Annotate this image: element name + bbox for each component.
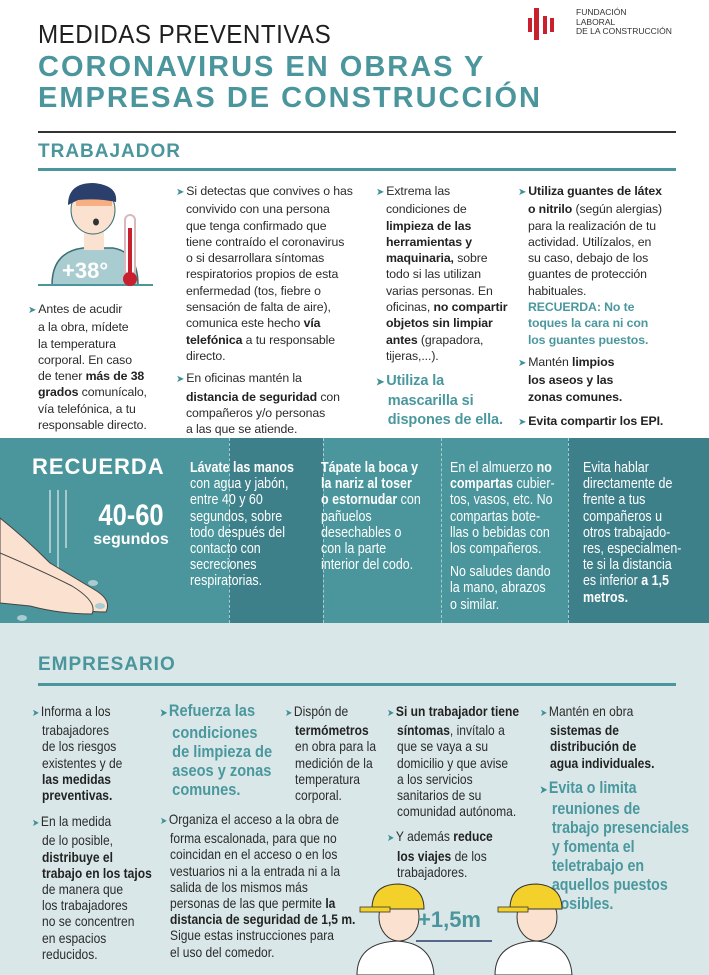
text: emp col2 refuerza: condiciones — [172, 723, 257, 742]
text: sintomas — [387, 703, 519, 880]
text: worker col2: respiratorios propios de esta — [186, 267, 338, 281]
text: 40-60 segundos — [93, 499, 169, 548]
text: worker col1: de tener más de 38 — [38, 369, 144, 383]
text: worker col3: ➤Utiliza la — [376, 373, 444, 389]
text: almuerzo: o similar. — [450, 597, 499, 613]
text: emp col1: existentes y de — [42, 755, 122, 771]
text: almuerzo: la mano, abrazos — [450, 580, 546, 596]
text: worker col3: tijeras,...). — [386, 349, 439, 363]
text: worker col4: los aseos y las — [528, 373, 613, 387]
text: worker col1: a la obra, mídete — [38, 320, 129, 334]
text: evita hablar — [583, 460, 681, 606]
text: tapate boca: Tápate la boca y — [321, 460, 418, 476]
text: emp col1 — [32, 703, 152, 962]
text: worker col3: condiciones de — [386, 202, 467, 216]
text: lavate manos: contacto con — [190, 541, 261, 557]
text: worker col4: ➤Utiliza guantes de látex — [518, 184, 662, 198]
text: worker col4: guantes de protección — [528, 267, 647, 281]
text: emp col1: trabajadores — [42, 722, 109, 738]
text: termometros: ➤Dispón de — [285, 703, 348, 719]
text: almuerzo: compartas cubier- — [450, 476, 555, 492]
text: tapate boca: desechables o — [321, 525, 401, 541]
text: emp col1: de manera que — [42, 881, 123, 897]
text: agua / teletrabajo: agua individuales. — [550, 755, 654, 771]
panel: recuerda band — [0, 438, 709, 623]
text: worker col2: ➤En oficinas mantén la — [176, 371, 302, 385]
text: worker col1: la temperatura — [38, 337, 116, 351]
icon: two workers with helmets and distance — [356, 884, 572, 975]
text: emp col2 refuerza: aseos y zonas — [172, 761, 271, 780]
text: worker col4: para la realización de tu — [528, 219, 656, 233]
text: evita hablar: Evita hablar — [583, 460, 649, 476]
text: lavate manos: Lávate las manos — [190, 460, 294, 476]
text: worker col1 — [28, 302, 147, 432]
text: worker col4: zonas comunes. — [528, 390, 622, 404]
text: worker col3: mascarilla si — [388, 393, 474, 409]
text: emp col1: en espacios — [42, 930, 106, 946]
text: worker col3: objetos sin limpiar — [386, 316, 493, 330]
text: worker col4: toques la cara ni con — [528, 316, 648, 330]
text: almuerzo: llas o bebidas con — [450, 525, 550, 541]
text: emp col1: trabajo en los tajos — [42, 865, 152, 881]
text: organiza: ➤Organiza el acceso a la obra de — [160, 811, 339, 827]
text: lavate manos — [190, 460, 294, 589]
logo: FUNDACIÓN — [576, 7, 627, 17]
text: emp col1: reducidos. — [42, 946, 98, 962]
text: termometros: corporal. — [295, 787, 342, 803]
text: sintomas: ➤Y además reduce — [387, 828, 493, 844]
text: almuerzo: No saludes dando — [450, 564, 551, 580]
text: emp col1: de lo posible, — [42, 832, 113, 848]
text: lavate manos: segundos, sobre — [190, 509, 282, 525]
text: evita hablar: te si la distancia — [583, 557, 672, 573]
text: emp col2 refuerza: de limpieza de — [172, 742, 272, 761]
text: worker col4: RECUERDA: No te — [528, 300, 634, 314]
text: worker col1: corporal. En caso — [38, 353, 132, 367]
text: tapate boca: o estornudar con — [321, 492, 421, 508]
text: agua / teletrabajo: teletrabajo en — [552, 857, 644, 875]
text: worker col2: distancia de seguridad con — [186, 390, 340, 404]
text: emp col1: de los riesgos — [42, 738, 116, 754]
text: 40-60 segundos: segundos — [93, 531, 169, 548]
text: lavate manos: con agua y jabón, — [190, 476, 288, 492]
text: worker col3: limpieza de las — [386, 219, 471, 233]
text: worker col2: directo. — [186, 349, 225, 363]
text: emp col1: no se concentren — [42, 913, 134, 929]
text: evita hablar: res, especialmen- — [583, 541, 681, 557]
text: sintomas: síntomas, invítalo a — [397, 722, 505, 738]
text: termometros — [285, 703, 376, 803]
text: worker col3: varias personas. En — [386, 284, 493, 298]
text: sintomas: sanitarios de su — [397, 787, 481, 803]
text: 40-60 segundos: 40-60 — [98, 499, 164, 532]
icon: two workers with helmets and distance: +1,5m — [418, 907, 481, 932]
text: agua / teletrabajo: sistemas de — [550, 722, 619, 738]
text: agua / teletrabajo: y fomenta el — [552, 838, 635, 856]
text: organiza: coincidan en el acceso o en los — [170, 846, 337, 862]
text: worker col4: ➤Evita compartir los EPI. — [518, 414, 663, 428]
text: organiza: Sigue estas instrucciones para — [170, 927, 334, 943]
title: EMPRESAS DE CONSTRUCCIÓN — [38, 82, 542, 114]
text: worker col4: actividad. Utilízalos, en — [528, 235, 651, 249]
text: worker col2: tiene contraído el coronavirus — [186, 235, 344, 249]
text: tapate boca — [321, 460, 421, 573]
text: worker col3: oficinas, no compartir — [386, 300, 507, 314]
text: termometros: medición de la — [295, 755, 373, 771]
text: termometros: termómetros — [295, 722, 369, 738]
icon: hands washing — [0, 490, 108, 621]
text: tapate boca: interior del codo. — [321, 557, 413, 573]
text: almuerzo: compartas bote- — [450, 509, 540, 525]
text: sintomas: a los servicios — [397, 771, 473, 787]
text: agua / teletrabajo: posibles. — [552, 895, 613, 913]
text: tapate boca: la nariz al toser — [321, 476, 412, 492]
text: agua / teletrabajo — [540, 703, 689, 913]
text: lavate manos: todo después del — [190, 525, 285, 541]
text: evita hablar: es inferior a 1,5 — [583, 573, 669, 589]
text: lavate manos: entre 40 y 60 — [190, 492, 263, 508]
text: worker col3: dispones de ella. — [388, 412, 503, 428]
text: emp col1: los trabajadores — [42, 897, 128, 913]
text: tapate boca: con la parte — [321, 541, 386, 557]
text: worker col3: ➤Extrema las — [376, 184, 450, 198]
text: organiza: salida de los mismos más — [170, 879, 308, 895]
text: worker col1: responsable directo. — [38, 418, 147, 432]
text: evita hablar: otros trabajado- — [583, 525, 670, 541]
text: agua / teletrabajo: ➤Mantén en obra — [540, 703, 633, 719]
text: emp col1: ➤En la medida — [32, 813, 111, 829]
text: termometros: en obra para la — [295, 738, 376, 754]
text: worker col3: antes (grapadora, — [386, 333, 483, 347]
text: emp col1: ➤Informa a los — [32, 703, 111, 719]
text: worker col4: o nitrilo (según alergias) — [528, 202, 662, 216]
text: sintomas: domicilio y que avise — [397, 755, 508, 771]
text: agua / teletrabajo: reuniones de — [552, 800, 640, 818]
text: worker col3: todo si las utilizan — [386, 267, 481, 281]
icon: sick worker with thermometer: +38° — [62, 258, 108, 283]
text: evita hablar: compañeros u — [583, 509, 662, 525]
text: worker col2: a las que se atiende. — [186, 422, 297, 436]
text: evita hablar: directamente de — [583, 476, 672, 492]
icon: sick worker with thermometer — [38, 183, 153, 286]
text: termometros: temperatura — [295, 771, 360, 787]
logo: LABORAL — [576, 16, 615, 26]
text: worker col2: ➤Si detectas que convives o has — [176, 184, 353, 198]
text: lavate manos: respiratorias. — [190, 573, 262, 589]
text: almuerzo — [450, 460, 555, 613]
text: agua / teletrabajo: distribución de — [550, 738, 636, 754]
text: emp col2 refuerza: ➤Refuerza las — [160, 701, 255, 720]
text: worker col3: herramientas y — [386, 235, 472, 249]
logo: DE LA CONSTRUCCIÓN — [576, 26, 672, 36]
text: emp col1: distribuye el — [42, 849, 113, 865]
text: almuerzo: En el almuerzo no — [450, 460, 552, 476]
text: worker col2: convivido con una persona — [186, 202, 330, 216]
text: emp col2 refuerza — [160, 701, 272, 799]
text: worker col2 — [176, 184, 353, 436]
text: agua / teletrabajo: aquellos puestos — [552, 876, 668, 894]
title: MEDIDAS PREVENTIVAS — [38, 19, 331, 49]
text: worker col2: compañeros y/o personas — [186, 406, 325, 420]
text: emp col1: preventivas. — [42, 787, 112, 803]
text: worker col3 — [376, 184, 508, 428]
text: worker col4 — [518, 184, 663, 428]
text: worker col1: grados comunícalo, — [38, 385, 147, 399]
text: organiza: el uso del comedor. — [170, 944, 274, 960]
text: worker col2: o si desarrollara síntomas — [186, 251, 324, 265]
panel: empresario — [0, 623, 709, 975]
text: worker col2: que tenga confirmado que — [186, 219, 326, 233]
text: worker col2: sensación de falta de aire), — [186, 300, 331, 314]
text: worker col4: ➤Mantén limpios — [518, 355, 614, 369]
text: worker col2: enfermedad (tos, fiebre o — [186, 284, 321, 298]
text: worker col1: vía telefónica, a tu — [38, 402, 136, 416]
text: worker col3: maquinaria, sobre — [386, 251, 487, 265]
text: organiza: distancia de seguridad de 1,5 m. — [170, 911, 355, 927]
text: sintomas: que se vaya a su — [397, 738, 488, 754]
title — [38, 19, 542, 114]
text: almuerzo: tos, vasos, etc. No — [450, 492, 553, 508]
text: agua / teletrabajo: trabajo presenciales — [552, 819, 689, 837]
text: lavate manos: secreciones — [190, 557, 257, 573]
text: sintomas: los viajes de los — [397, 848, 487, 864]
text: organiza — [160, 811, 355, 960]
text: worker col2: telefónica a tu responsable — [186, 333, 335, 347]
text: sintomas: ➤Si un trabajador tiene — [387, 703, 519, 719]
text: organiza: personas de las que permite la — [170, 895, 335, 911]
text: organiza: forma escalonada, para que no — [170, 830, 337, 846]
text: sintomas: comunidad autónoma. — [397, 803, 516, 819]
text: almuerzo: los compañeros. — [450, 541, 541, 557]
text: evita hablar: metros. — [583, 590, 628, 606]
text: tapate boca: pañuelos — [321, 509, 372, 525]
text: evita hablar: frente a tus — [583, 492, 645, 508]
text: emp col2 refuerza: comunes. — [172, 780, 240, 799]
text: agua / teletrabajo: ➤Evita o limita — [540, 779, 636, 797]
text: worker col2: comunica este hecho vía — [186, 316, 320, 330]
heading: recuerda: RECUERDA — [32, 454, 165, 479]
text: sintomas: trabajadores. — [397, 864, 467, 880]
heading: empresario: EMPRESARIO — [38, 654, 176, 675]
title: CORONAVIRUS EN OBRAS Y — [38, 51, 485, 83]
text: worker col4: los guantes puestos. — [528, 333, 648, 347]
text: emp col1: las medidas — [42, 771, 111, 787]
logo — [528, 7, 672, 40]
heading: trabajador: TRABAJADOR — [38, 141, 181, 162]
text: worker col4: habituales. — [528, 284, 586, 298]
text: organiza: vestuarios ni a la entrada ni a la — [170, 863, 340, 879]
text: worker col1: ➤Antes de acudir — [28, 302, 122, 316]
text: worker col4: su caso, debajo de los — [528, 251, 648, 265]
